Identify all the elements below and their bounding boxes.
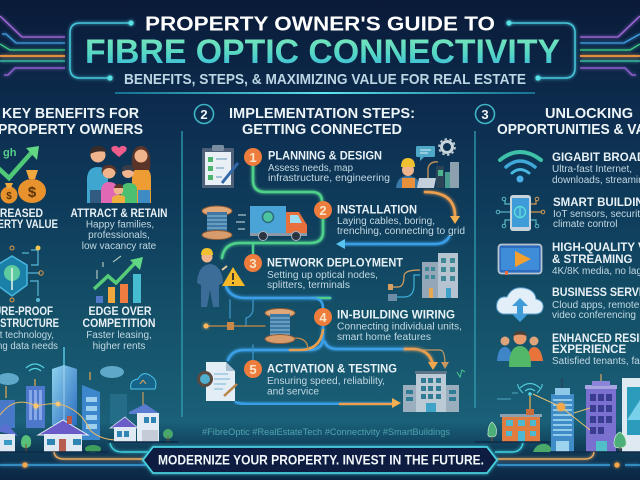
- step text 5: and service: [267, 386, 319, 398]
- circuit lines right: [580, 16, 640, 75]
- text: future-proof infrastructure: [0, 306, 59, 352]
- icon: cloud upload and download: [497, 288, 543, 322]
- step text 4: IN-BUILDING WIRING: [337, 310, 455, 322]
- icon: rising value money bags: $: [28, 184, 37, 201]
- icon: future-proof chip: [0, 246, 43, 302]
- icon: growth chart: [94, 256, 143, 303]
- text: business services: [552, 287, 640, 321]
- title line 2: FIBRE OPTIC CONNECTIVITY: [85, 33, 560, 71]
- step text 3: [267, 258, 403, 291]
- column dividers: [182, 131, 475, 417]
- text: attract and retain: professionals,: [88, 230, 150, 241]
- icon: wire reel: [227, 308, 295, 344]
- text: attract and retain: ATTRACT & RETAIN: [70, 208, 168, 220]
- icon: people group: [497, 331, 543, 367]
- step text 3: NETWORK DEPLOYMENT: [267, 258, 403, 270]
- icon: engineer with laptop: [396, 139, 459, 188]
- icon: video screen: [498, 244, 542, 275]
- text: edge over competition: higher rents: [93, 341, 145, 352]
- heading: key benefits: PROPERTY OWNERS: [0, 121, 143, 138]
- step text 1: PLANNING & DESIGN: [268, 150, 382, 162]
- step badge 1: [244, 148, 262, 166]
- call to action banner: [143, 447, 497, 473]
- step text 1: infrastructure, engineering: [268, 173, 390, 184]
- icon: rising value money bags: $: [6, 191, 12, 202]
- subtitle: BENEFITS, STEPS, & MAXIMIZING VALUE FOR REAL ESTATE: [124, 71, 526, 88]
- step badge 5: [244, 360, 262, 378]
- step badge 2: 2: [319, 203, 327, 218]
- step text 4: smart home features: [337, 332, 431, 343]
- icon: document and gear: [198, 362, 237, 401]
- step text 5: ACTIVATION & TESTING: [267, 364, 397, 376]
- icon: rising value money bags: [0, 146, 46, 204]
- text: gigabit broadband: [552, 152, 640, 186]
- step text 3: Setting up optical nodes,: [267, 270, 378, 281]
- step text 2: [337, 204, 465, 237]
- text: enhanced resident experience: [552, 333, 640, 367]
- icon: truck: [236, 206, 307, 240]
- icon: technician and warning: [197, 248, 245, 307]
- step 1: planning and design: [202, 139, 459, 188]
- text: attract and retain: Happy families,: [86, 220, 154, 230]
- icon: family: [87, 146, 151, 203]
- text: enhanced resident experience: EXPERIENCE: [552, 344, 626, 356]
- text: smart buildings: [553, 197, 640, 230]
- text: edge over competition: EDGE OVER: [88, 306, 152, 318]
- text: edge over competition: [82, 306, 156, 352]
- icon: cable spool: [202, 206, 232, 240]
- text: gigabit broadband: Ultra-fast Internet,: [552, 164, 632, 175]
- text: high-quality video: & STREAMING: [552, 254, 633, 266]
- step 2: installation: [202, 201, 465, 240]
- illustration: right city skyline: [475, 374, 640, 452]
- illustration: left city skyline: [0, 347, 178, 453]
- text: high-quality video: 4K/8K media, no lag: [552, 266, 640, 277]
- icon: office building: [403, 370, 465, 412]
- text: attract and retain: [70, 208, 168, 252]
- step text 2: trenching, connecting to grid: [337, 226, 465, 237]
- title line 1: PROPERTY OWNER'S GUIDE TO: [145, 12, 495, 36]
- step text 4: [337, 310, 462, 343]
- text: high-quality video: [552, 242, 640, 277]
- text: increased property value: [0, 208, 58, 231]
- call to action banner: MODERNIZE YOUR PROPERTY. INVEST IN THE FUTURE.: [158, 452, 484, 468]
- heading: key benefits: [0, 105, 143, 138]
- arrowheads: [204, 216, 460, 408]
- step 5: activation and testing: [198, 360, 465, 412]
- panel: unlocking opportunities: [476, 104, 640, 367]
- heading: implementation steps: IMPLEMENTATION STEPS:: [229, 105, 415, 122]
- hashtags: #FibreOptic #RealEstateTech #Connectivity #SmartBuildings: [202, 427, 450, 438]
- step text 3: splitters, terminals: [267, 280, 350, 291]
- text: edge over competition: COMPETITION: [82, 318, 156, 330]
- panel: implementation steps: [194, 104, 465, 438]
- heading: key benefits: KEY BENEFITS FOR: [2, 105, 139, 122]
- heading: implementation steps: GETTING CONNECTED: [242, 121, 402, 138]
- step badge 4: 4: [319, 310, 327, 325]
- header: [0, 12, 640, 88]
- step text 1: Assess needs, map: [268, 163, 353, 174]
- step text 4: Connecting individual units,: [337, 322, 462, 332]
- circuit lines left: [0, 16, 65, 75]
- step badge 3: [244, 254, 262, 272]
- panel: key benefits: [0, 105, 168, 352]
- heading: unlocking opportunities: 3: [481, 107, 489, 122]
- heading: unlocking opportunities: UNLOCKING: [545, 105, 633, 122]
- step text 2: INSTALLATION: [337, 204, 417, 216]
- step text 5: Ensuring speed, reliability,: [267, 376, 385, 387]
- step badge 2: [314, 201, 332, 219]
- step text 1: [268, 150, 390, 184]
- step badge 3: 3: [249, 256, 257, 271]
- title frame: [70, 20, 575, 81]
- footer circuit lines: [0, 443, 640, 468]
- step text 2: Laying cables, boring,: [337, 216, 435, 227]
- step badge 1: 1: [249, 150, 257, 165]
- heading: implementation steps: 2: [200, 107, 208, 122]
- heading: unlocking opportunities: [476, 104, 640, 138]
- text: edge over competition: Faster leasing,: [86, 330, 152, 341]
- icon: clipboard: [202, 145, 238, 188]
- step text 5: [267, 364, 397, 398]
- icon: connected tower: [388, 253, 458, 301]
- icon: smart phone circuit: [496, 195, 545, 231]
- text: attract and retain: low vacancy rate: [82, 241, 157, 252]
- step 4: in-building wiring: [227, 308, 462, 344]
- icon: wifi: [500, 152, 541, 182]
- fibre route paths: [206, 166, 455, 404]
- icon: rising value money bags: gh: [3, 147, 17, 159]
- step 3: network deployment: [197, 248, 458, 307]
- step badge 4: [314, 308, 332, 326]
- step badge 5: 5: [249, 362, 257, 377]
- heading: implementation steps: [194, 104, 415, 138]
- text: business services: video conferencing: [552, 310, 636, 321]
- text: smart buildings: climate control: [553, 219, 617, 230]
